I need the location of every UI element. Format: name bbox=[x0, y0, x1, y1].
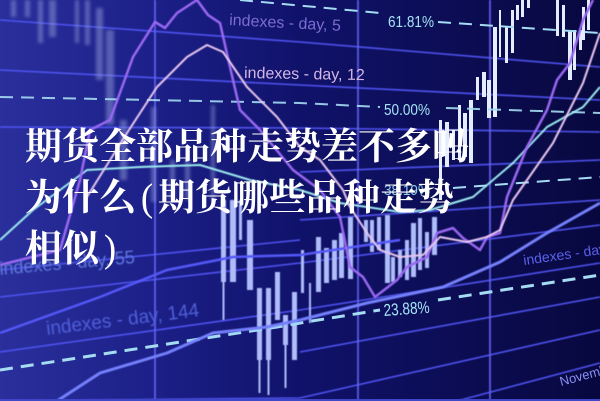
label: indexes day 144: indexes - day, 144 bbox=[45, 300, 201, 340]
label: 23.88%: 23.88% bbox=[383, 298, 430, 320]
title: 为什么 期货哪些品种走势 bbox=[25, 178, 454, 219]
faded candlesticks, upper left bbox=[11, 0, 215, 202]
label: 61.81%: 61.81% bbox=[388, 14, 434, 31]
title: ) bbox=[104, 228, 116, 271]
title: ( bbox=[141, 177, 153, 220]
curve: index day 200 bbox=[57, 203, 600, 401]
title bbox=[25, 127, 469, 271]
label: 50.00%: 50.00% bbox=[384, 102, 430, 119]
bottom edge bbox=[0, 399, 600, 401]
curve: index day 12 bbox=[85, 33, 600, 257]
title: 期货全部品种走势差不多吗 bbox=[25, 127, 469, 168]
bright candlesticks, right bbox=[439, 0, 590, 200]
label: indexes day 12: indexes - day, 12 bbox=[244, 65, 365, 84]
label: indexes day 55: indexes - day, 55 bbox=[0, 247, 136, 279]
curve: index day 144 bbox=[0, 240, 400, 333]
label: indexes day 5: indexes - day, 5 bbox=[229, 12, 341, 35]
curve: index day 5 bbox=[0, 0, 593, 297]
curve: index day 55 bbox=[0, 87, 600, 240]
candlesticks bbox=[221, 200, 437, 395]
label: 38.19%: 38.19% bbox=[384, 182, 430, 199]
title: 相似 bbox=[25, 229, 99, 270]
